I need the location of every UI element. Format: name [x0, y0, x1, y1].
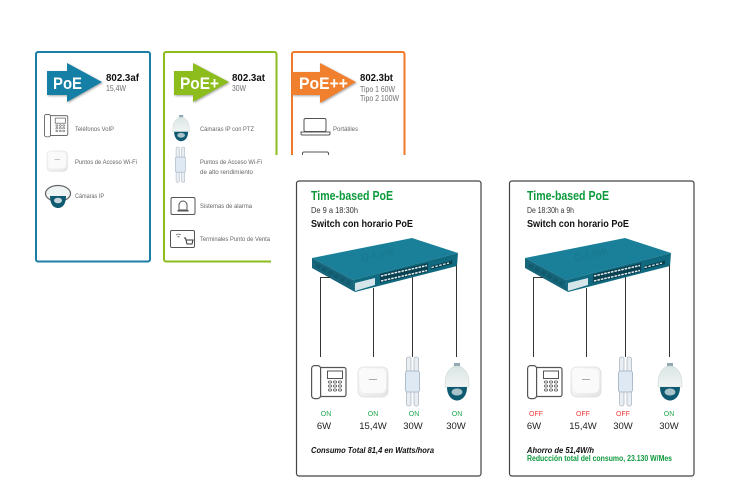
label: alarm systems: Sistemas de alarma: [200, 203, 252, 210]
switch: [312, 238, 458, 292]
arrow: PoE+: [174, 63, 229, 102]
label: phones: Teléfonos VoIP: [75, 126, 114, 133]
savings: Ahorro de 51,4W/h: [526, 446, 594, 455]
heading: 802.3bt: [360, 72, 399, 103]
icon: phone: [528, 366, 562, 399]
savings: Reducción total del consumo, 23.130 W/Mes: [527, 454, 672, 463]
arrow: PoE: PoE: [53, 75, 82, 93]
device status and power: [527, 411, 679, 432]
device status and power: OFF: [576, 411, 590, 418]
device status and power: ON: [452, 411, 462, 418]
panel: PoE: [36, 52, 150, 262]
icon: phone: [312, 366, 346, 399]
icon: point-of-sale terminal: [170, 230, 194, 248]
icon: outdoor access point: [175, 147, 185, 182]
schedule: De 9 a 18:30h: [311, 206, 358, 215]
heading: 802.3at: 802.3at: [232, 72, 265, 84]
subheading: switch: Switch con horario PoE: [527, 218, 629, 230]
device status and power: 30W: [613, 421, 633, 432]
switch: [525, 238, 671, 292]
device status and power: 6W: [527, 421, 541, 432]
label: IP cameras: Cámaras IP: [75, 193, 104, 200]
device status and power: 15,4W: [569, 421, 597, 432]
label: PTZ cameras: Cámaras IP con PTZ: [200, 126, 254, 133]
device status and power: 30W: [659, 421, 679, 432]
panel: schedule 9 to 18:30: [296, 181, 481, 476]
device status and power: ON: [321, 411, 331, 418]
icon: access point: [47, 151, 67, 171]
icon: PTZ camera: [658, 363, 682, 400]
icon: PTZ camera: [173, 115, 190, 141]
icon: laptop: [301, 118, 330, 135]
heading: time-based PoE: Time-based PoE: [311, 189, 393, 203]
icon: phone: [44, 114, 68, 137]
arrow: PoE++: PoE++: [299, 75, 348, 93]
heading: 802.3at: [232, 72, 265, 93]
subheading: switch: Switch con horario PoE: [311, 218, 413, 230]
arrow: PoE+: PoE+: [180, 75, 219, 93]
savings: [526, 446, 672, 463]
panel: PoE++: [292, 52, 404, 172]
label: access points: Puntos de Acceso Wi-Fi: [75, 159, 137, 166]
icon: alarm: [171, 198, 195, 214]
label: high-performance access points: Puntos de Acceso Wi-Fi: [200, 159, 262, 166]
white cover over panel edges: [271, 155, 750, 500]
label: laptops: Portátiles: [333, 126, 359, 133]
device status and power: ON: [664, 411, 674, 418]
total consumption: Consumo Total 81,4 en Watts/hora: [311, 446, 435, 455]
icon: outdoor access point: [406, 357, 420, 406]
heading: 802.3bt: Tipo 2 100W: [360, 93, 399, 103]
device status and power: ON: [409, 411, 419, 418]
heading: 802.3af: [106, 72, 139, 93]
icon: access point: [358, 367, 388, 397]
device status and power: 15,4W: [359, 421, 387, 432]
device status and power: 30W: [446, 421, 466, 432]
heading: 802.3bt: Tipo 1 60W: [360, 84, 395, 94]
device status and power: OFF: [529, 411, 543, 418]
icon: dome camera: [46, 186, 70, 208]
schedule: De 18:30h a 9h: [527, 206, 574, 215]
connection lines: [320, 265, 456, 357]
panel: schedule 18:30 to 9: [510, 181, 694, 476]
device status and power: 6W: [317, 421, 331, 432]
device status and power: ON: [368, 411, 378, 418]
label: point-of-sale terminals: Terminales Punto de Venta: [200, 236, 270, 243]
device status and power: [317, 411, 466, 432]
icon: PTZ camera: [445, 363, 469, 400]
device status and power: 30W: [403, 421, 423, 432]
icon: outdoor access point: [618, 357, 632, 406]
label: high-performance access points: de alto rendimiento: [200, 169, 253, 176]
connection lines: [534, 265, 670, 357]
device status and power: OFF: [616, 411, 630, 418]
heading: 802.3at: 30W: [232, 83, 246, 93]
icon: access point: [571, 367, 601, 397]
heading: 802.3af: 802.3af: [106, 72, 139, 84]
panel: PoE+: [164, 52, 276, 262]
heading: 802.3bt: 802.3bt: [360, 72, 393, 84]
heading: 802.3af: 15,4W: [106, 83, 126, 93]
label: high-performance access points: [200, 159, 262, 176]
icon: clipped device: [302, 152, 328, 166]
arrow: PoE: [47, 63, 102, 102]
heading: time-based PoE: Time-based PoE: [527, 189, 609, 203]
